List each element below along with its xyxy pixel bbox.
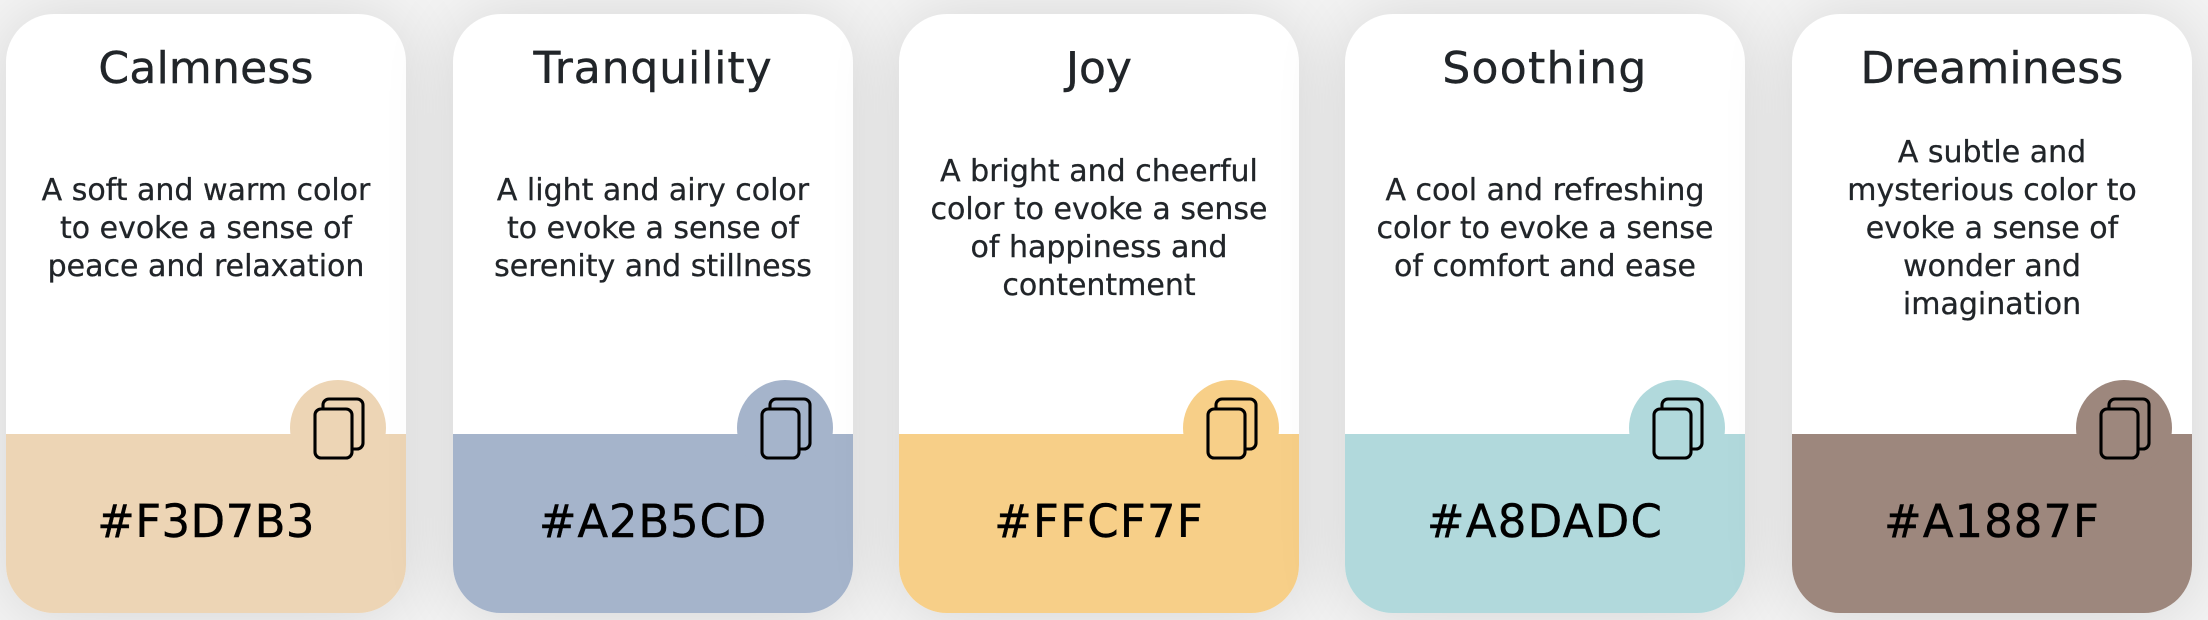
description text [1847, 135, 2137, 322]
description text: color to evoke a sense [930, 192, 1268, 227]
description text: to evoke a sense of [60, 211, 352, 246]
heading: Dreaminess: Dreaminess [1861, 43, 2123, 94]
description text: serenity and stillness [494, 249, 812, 284]
panel: Joy card [899, 14, 1299, 613]
heading: Soothing: Soothing [1442, 43, 1648, 94]
panel: Tranquility card [453, 14, 853, 613]
copy button circle [290, 380, 386, 476]
description text [42, 173, 370, 284]
description text: wonder and [1903, 249, 2081, 284]
copy button circle [1629, 380, 1725, 476]
description text [930, 154, 1268, 303]
description text: color to evoke a sense [1376, 211, 1714, 246]
description text: of comfort and ease [1394, 249, 1696, 284]
description text: A cool and refreshing [1386, 173, 1704, 208]
hex code: #F3D7B3 [97, 495, 315, 548]
description text: A subtle and [1898, 135, 2086, 170]
icon: copy [2099, 398, 2151, 460]
description text [1376, 173, 1714, 284]
icon: copy [1206, 398, 1258, 460]
description text: evoke a sense of [1866, 211, 2118, 246]
panel: Dreaminess card [1792, 14, 2192, 613]
panel: Calmness card [6, 14, 406, 613]
copy button circle [737, 380, 833, 476]
icon: copy [313, 398, 365, 460]
copy button circle [2076, 380, 2172, 476]
description text: mysterious color to [1847, 173, 2137, 208]
description text: contentment [1002, 268, 1196, 303]
color strip [899, 434, 1299, 613]
color strip [453, 434, 853, 613]
description text: A bright and cheerful [940, 154, 1258, 189]
description text: of happiness and [970, 230, 1227, 265]
description text: A soft and warm color [42, 173, 370, 208]
icon: copy [760, 398, 812, 460]
heading: Joy: Joy [1066, 43, 1132, 94]
icon: copy [1652, 398, 1704, 460]
hex code: #A8DADC [1427, 495, 1663, 548]
copy button circle [1183, 380, 1279, 476]
color strip [1345, 434, 1745, 613]
description text [494, 173, 812, 284]
color strip [6, 434, 406, 613]
color strip [1792, 434, 2192, 613]
description text: to evoke a sense of [507, 211, 799, 246]
hex code: #A1887F [1884, 495, 2100, 548]
description text: peace and relaxation [48, 249, 364, 284]
description text: imagination [1903, 287, 2081, 322]
description text: A light and airy color [497, 173, 809, 208]
heading: Calmness: Calmness [98, 43, 314, 94]
panel: Soothing card [1345, 14, 1745, 613]
heading: Tranquility: Tranquility [533, 43, 773, 94]
hex code: #A2B5CD [539, 495, 767, 548]
hex code: #FFCF7F [994, 495, 1204, 548]
